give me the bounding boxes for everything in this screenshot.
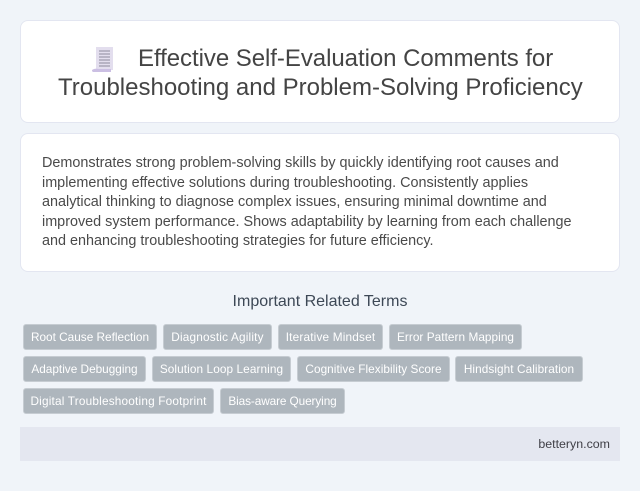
description text: Demonstrates strong problem-solving skills by quickly identifying root causes and	[42, 155, 559, 171]
tag	[455, 356, 583, 382]
tag	[297, 356, 450, 382]
tag	[220, 388, 345, 414]
tag	[23, 324, 157, 350]
tag: Diagnostic Agility	[171, 330, 264, 344]
panel: title card	[20, 20, 620, 123]
tag: Adaptive Debugging	[31, 362, 138, 376]
icon: scroll document	[92, 47, 113, 72]
tag: Cognitive Flexibility Score	[305, 362, 442, 376]
title line 1: Effective Self-Evaluation Comments for	[138, 45, 553, 72]
tag: Root Cause Reflection	[31, 330, 149, 344]
description text	[42, 155, 572, 249]
description text: and enhancing troubleshooting strategies for future efficiency.	[42, 233, 433, 249]
tag: Digital Troubleshooting Footprint	[30, 394, 207, 408]
footer bar	[20, 427, 620, 461]
heading: related terms: Important Related Terms	[233, 293, 407, 310]
footer source text: betteryn.com	[538, 437, 610, 451]
tag: Bias-aware Querying	[228, 394, 337, 408]
tag	[278, 324, 383, 350]
tag: Iterative Mindset	[286, 330, 375, 344]
tag	[23, 356, 146, 382]
tag	[163, 324, 272, 350]
tag: Hindsight Calibration	[464, 362, 574, 376]
tag	[389, 324, 522, 350]
description text: analytical thinking to diagnose complex issues, ensuring minimal downtime and	[42, 194, 547, 210]
title line 2: Troubleshooting and Problem-Solving Proficiency	[58, 74, 583, 101]
tag	[152, 356, 291, 382]
description text: implementing effective solutions during troubleshooting. Consistently applies	[42, 174, 528, 190]
tag: Error Pattern Mapping	[397, 330, 514, 344]
tags: related terms	[23, 324, 583, 414]
panel: description card	[20, 133, 620, 272]
description text: improved system performance. Shows adaptability by learning from each challenge	[42, 214, 572, 230]
tag	[23, 388, 214, 414]
tag: Solution Loop Learning	[160, 362, 283, 376]
